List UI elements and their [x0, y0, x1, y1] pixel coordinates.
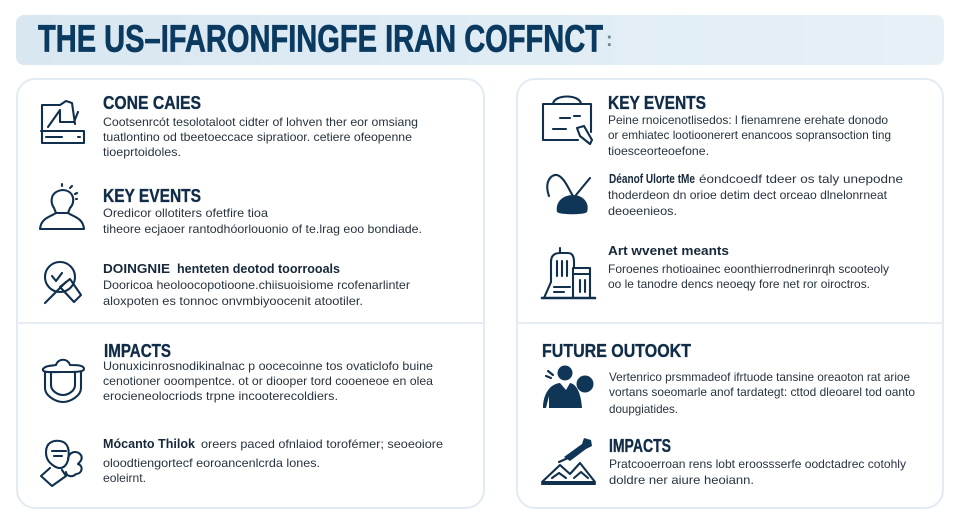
- section: impacts right: IMPACTS: [609, 436, 671, 456]
- section: deanof ulorte: thoderdeon dn orioe detim dect orceao dlnelonrneat: [608, 188, 888, 202]
- section: doctrine: DOINGNIE: [103, 262, 170, 276]
- section: core causes: tioeprtoidoles.: [103, 145, 181, 159]
- section: deanof ulorte: éondcoedf tdeer os taly unepodne: [699, 172, 904, 186]
- icon: briefcase and pen: [543, 96, 592, 144]
- section: art wvenet meants: oo le tanodre dencs neoeqy fore net ror oiroctros.: [608, 277, 870, 291]
- section: impacts right: doldre ner aiure heoiann.: [609, 473, 754, 487]
- section: key events right: or emhiatec lootioonerert enancoos sopransoction ting: [608, 128, 891, 142]
- icon: person with idea: [40, 184, 84, 229]
- section: doctrine: Dooricoa heoloocopotioone.chiisuoisiome rcofenarlinter: [103, 278, 410, 292]
- icon: arc and solid dome: [547, 175, 590, 214]
- section: doctrine: henteten deotod toorrooals: [177, 262, 340, 276]
- panel: right column: [517, 79, 943, 508]
- icon: masked figure: [41, 441, 82, 486]
- section: future outlook: FUTURE OUTOOKT: [542, 341, 691, 361]
- panel: left column: [17, 79, 484, 508]
- section: impacts: IMPACTS: [104, 341, 171, 361]
- section: deanof ulorte: Déanof Ulorte tMe: [609, 172, 695, 186]
- icon: crossed tool circle: [45, 262, 81, 303]
- section: impacts: Uonuxicinrosnodikinalnac p oocecoinne tos ovaticlofo buine: [103, 359, 433, 373]
- section: future outlook: [542, 341, 915, 416]
- section: key events right: [608, 93, 891, 158]
- section: impacts: erocieneolocriods trpne incooterecoldiers.: [103, 389, 338, 403]
- icon: tool over mountains: [542, 438, 595, 484]
- icon: helmet shield: [43, 360, 84, 402]
- section: future outlook: Vertenrico prsmmadeof ifrtuode tansine oreaoton rat arioe: [609, 370, 910, 384]
- title colon: :: [606, 29, 613, 51]
- section: art wvenet meants: [608, 244, 889, 291]
- section: key events right: tioesceorteoefone.: [608, 144, 709, 158]
- section: mocanto thilok: Mócanto Thilok: [103, 437, 195, 451]
- section: core causes: tuatlontino od tbeetoeccace sipratioor. cetiere ofeopenne: [103, 130, 412, 144]
- section: doctrine: aloxpoten es tonnoc onvmbiyoocenit atootiler.: [103, 294, 363, 308]
- icon: building and bars: [542, 248, 595, 298]
- section: deanof ulorte: deoeenieos.: [608, 204, 677, 218]
- section: key events: KEY EVENTS: [103, 186, 201, 206]
- section: impacts: cenotioner ooompentce. ot or diooper tord cooeneoe en olea: [103, 374, 433, 388]
- header banner: [16, 15, 944, 65]
- section: mocanto thilok: [103, 437, 443, 485]
- icon: speaker silhouette: [543, 366, 594, 408]
- section: mocanto thilok: eoleirnt.: [103, 471, 146, 485]
- section: impacts right: [609, 436, 906, 487]
- section: mocanto thilok: oreers paced ofnlaiod torofémer; seoeoiore: [201, 437, 443, 451]
- section: key events: [103, 186, 422, 236]
- section: doctrine: [103, 262, 410, 308]
- section: core causes: CONE CAIES: [103, 93, 201, 113]
- title: THE US–IFARONFINGFE IRAN COFFNCT: [38, 18, 603, 60]
- section: art wvenet meants: Art wvenet meants: [608, 244, 729, 258]
- section: mocanto thilok: oloodtiengortecf eoroancenlcrda lones.: [103, 456, 320, 470]
- section: impacts: [103, 341, 433, 403]
- section: deanof ulorte: [608, 172, 904, 218]
- section: core causes: [103, 93, 418, 159]
- section: future outlook: vortans soeomarle anof tardategt: cttod dleoarel tod oanto: [609, 385, 915, 399]
- section: art wvenet meants: Foroenes rhotioainec eoonthierrodnerinrqh scooteoly: [608, 262, 889, 276]
- section: impacts right: Pratcooerroan rens lobt eroossserfe oodctadrec cotohly: [609, 457, 906, 471]
- section: future outlook: doupgiatides.: [609, 402, 678, 416]
- section: core causes: Cootsenrcót tesolotaloot cidter of lohven ther eor omsiang: [103, 115, 418, 129]
- icon: document stack: [41, 101, 84, 143]
- section: key events right: KEY EVENTS: [608, 93, 706, 113]
- section: key events: tiheore ecjaoer rantodhóorlouonio of te.lrag eoo bondiade.: [103, 222, 422, 236]
- section: key events right: Peine rnoicenotlisedos: l fienamrene erehate donodo: [608, 113, 888, 127]
- section: key events: Oredicor ollotiters ofetfire tioa: [103, 206, 268, 220]
